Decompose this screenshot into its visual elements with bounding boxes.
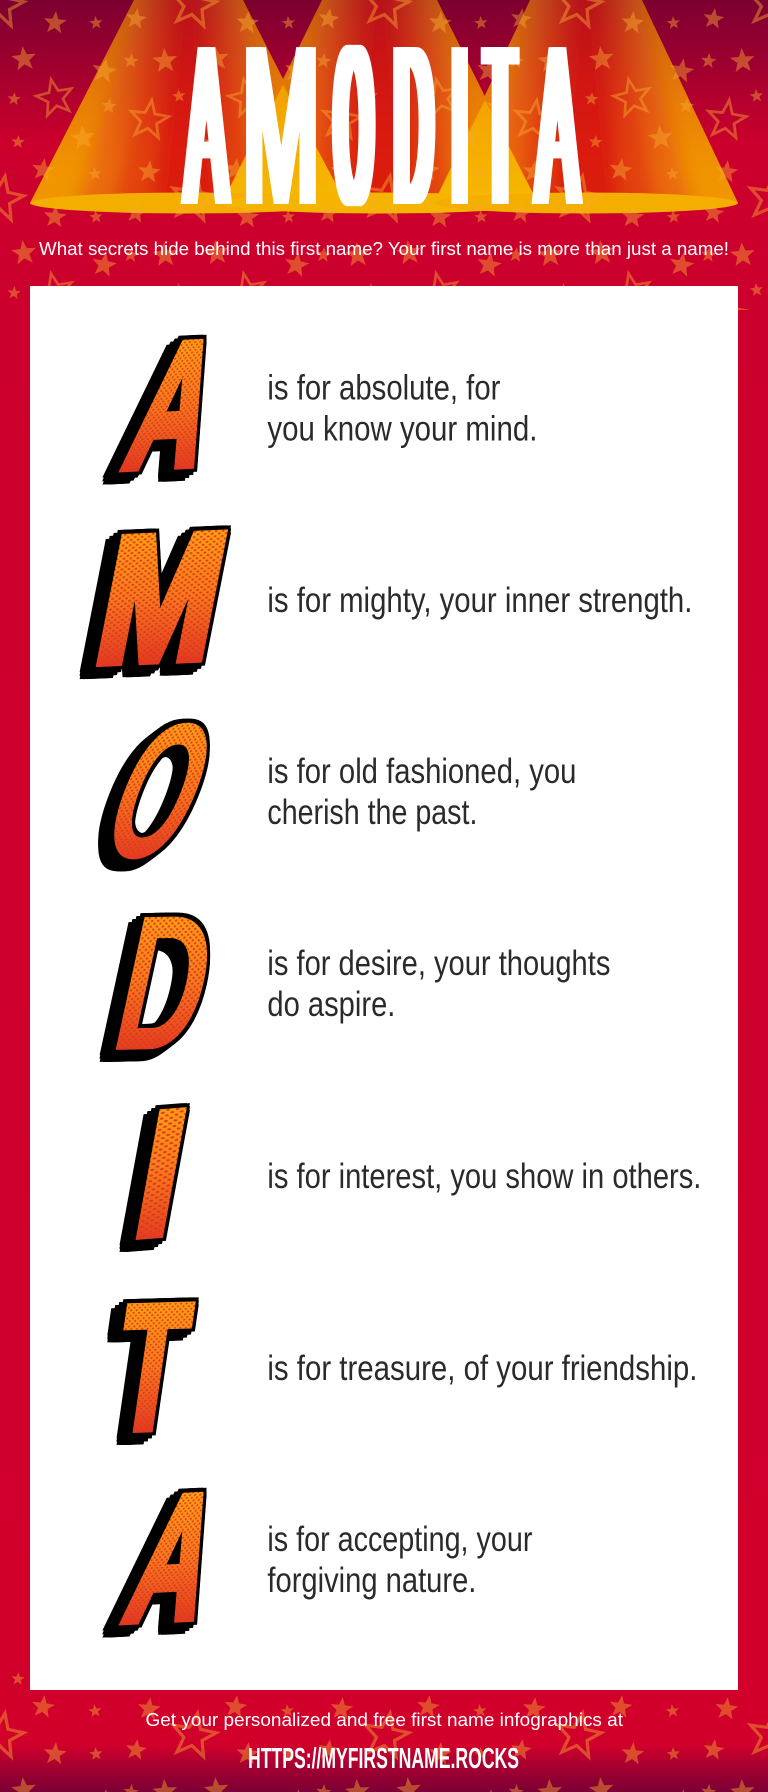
footer text: Get your personalized and free first name infographics at (146, 1709, 623, 1730)
icon: comic letter I: I (115, 1065, 207, 1282)
title: D (395, 0, 432, 253)
text: mighty: is for mighty, your inner strength. (267, 581, 692, 620)
cone: right spotlight (438, 0, 738, 203)
row: letter A (absolute) (110, 303, 537, 506)
title: O (336, 0, 372, 253)
panel: white card (30, 286, 738, 1690)
title (180, 0, 584, 253)
title: M (242, 0, 318, 253)
icon: comic letter M: M (84, 497, 240, 700)
icon: comic letter T: T (104, 1266, 200, 1468)
row: letter D (desire) (99, 874, 610, 1091)
text: absolute: you know your mind. (267, 410, 537, 448)
text: accepting: is for accepting, your (267, 1520, 533, 1559)
title: T (486, 0, 515, 253)
text: accepting (267, 1520, 533, 1600)
cone: middle spotlight (230, 0, 485, 194)
text: accepting: forgiving nature. (267, 1561, 476, 1600)
text: desire: is for desire, your thoughts (267, 944, 610, 983)
text: old fashioned: cherish the past. (267, 793, 477, 832)
icon: comic letter A: A (110, 1456, 240, 1659)
footer url: HTTPS://MYFIRSTNAME.ROCKS (248, 1743, 519, 1775)
text: desire (267, 944, 610, 1024)
text: old fashioned: is for old fashioned, you (267, 752, 576, 791)
row: letter O (old fashioned) (79, 681, 576, 900)
text: absolute (267, 368, 537, 448)
row: letter I (interest) (115, 1065, 701, 1282)
star pattern: bottom (0, 1660, 768, 1792)
title: A (186, 0, 226, 253)
row: letter T (treasure) (104, 1266, 697, 1468)
title: A (537, 0, 577, 253)
text: absolute: is for absolute, for (267, 368, 501, 408)
icon: comic letter A: A (110, 303, 240, 506)
cone overlaps and floor ellipses (30, 85, 738, 214)
row: letter A (accepting) (110, 1456, 533, 1659)
text: desire: do aspire. (267, 985, 395, 1024)
spotlight cones (30, 0, 738, 203)
title: I (434, 0, 484, 253)
text: treasure: is for treasure, of your friendship. (267, 1349, 697, 1388)
cone: left spotlight (30, 0, 283, 203)
text: old fashioned (267, 752, 576, 832)
row: letter M (mighty) (84, 497, 692, 700)
icon: comic letter D: D (99, 874, 232, 1091)
subtitle: What secrets hide behind this first name? Your first name is more than just a name! (39, 238, 729, 259)
star pattern: top (0, 0, 768, 310)
icon: comic letter O: O (79, 681, 242, 900)
